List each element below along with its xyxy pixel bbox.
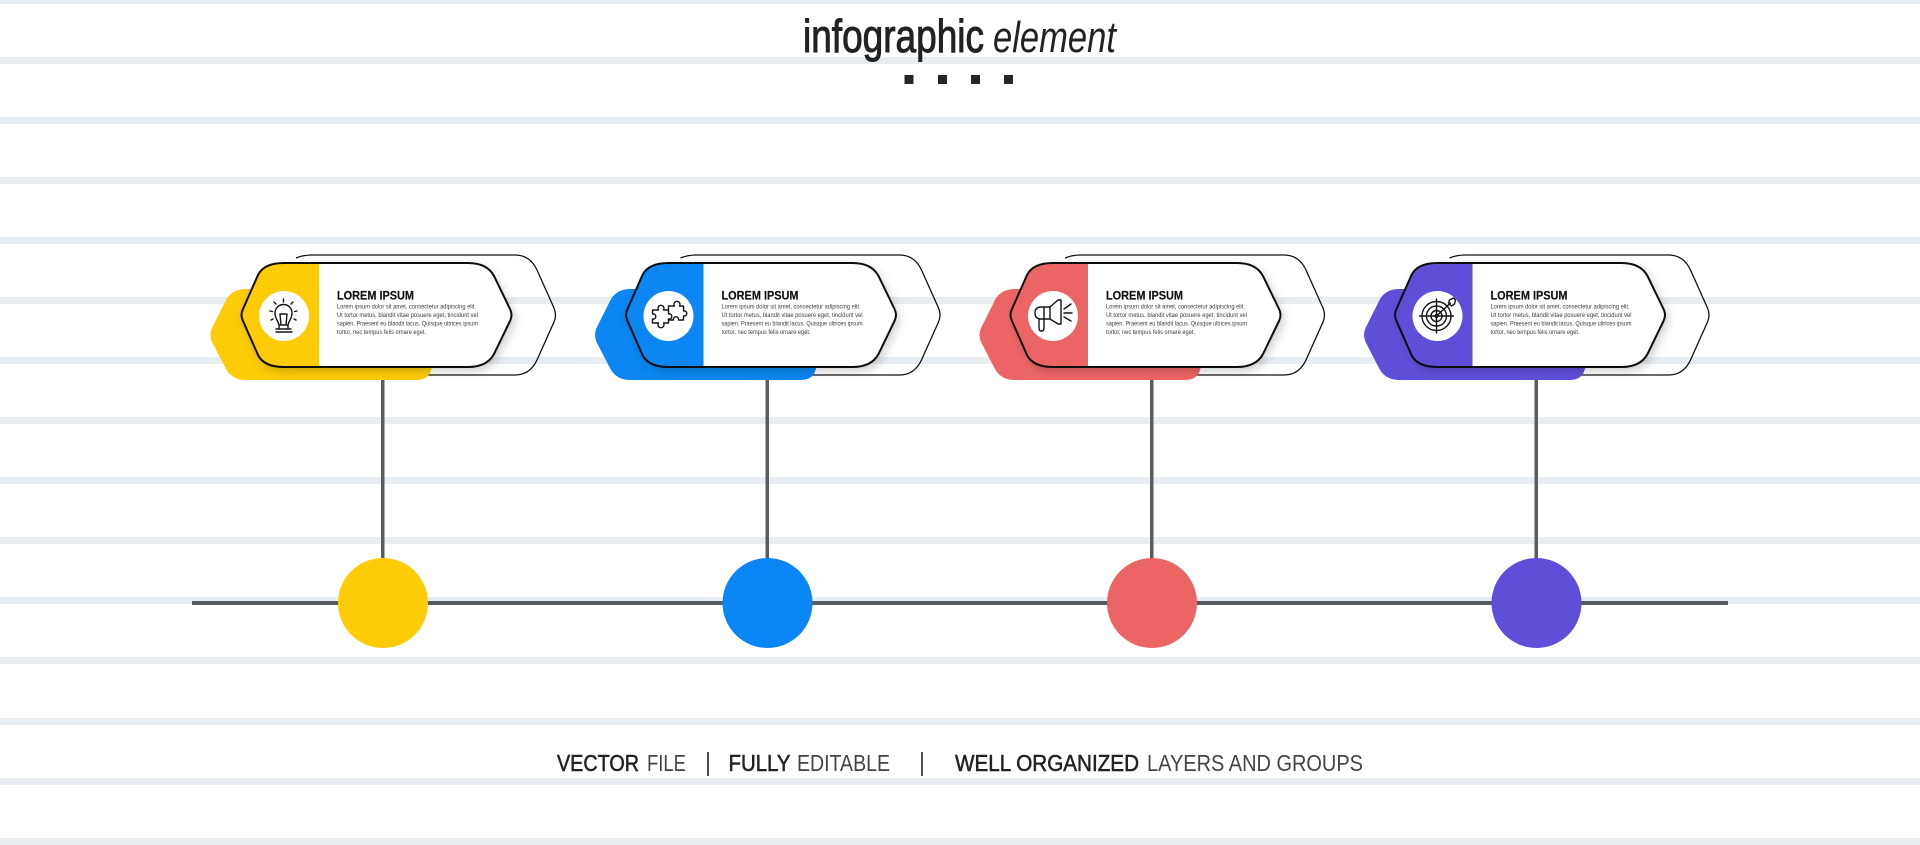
title dots	[904, 75, 1013, 84]
step 4 panel	[1364, 255, 1709, 648]
body text: Ut tortor metus, blandit vitae posuere eget, tincidunt vel	[1490, 312, 1632, 319]
body text: tortor, nec tempus felis ornare eget.	[722, 329, 811, 336]
body text: tortor, nec tempus felis ornare eget.	[1490, 329, 1580, 336]
timeline axis	[192, 601, 1728, 605]
body text	[1106, 304, 1247, 336]
title: element	[993, 13, 1117, 62]
step 2 panel	[595, 255, 940, 648]
coloured back hexagon	[210, 289, 432, 380]
icon: puzzle	[644, 291, 694, 341]
body text: Lorem ipsum dolor sit amet, consectetur adipiscing elit.	[1106, 304, 1245, 310]
footer caption: LAYERS AND GROUPS	[1147, 750, 1363, 776]
coloured back hexagon	[595, 289, 816, 380]
body text	[337, 304, 478, 336]
front card	[626, 263, 896, 367]
back outline	[1450, 255, 1709, 375]
front outline	[1395, 263, 1665, 367]
timeline node	[722, 558, 812, 648]
timeline node	[338, 558, 428, 648]
body text: Ut tortor metus, blandit vitae posuere eget, tincidunt vel	[722, 312, 862, 319]
timeline node	[1107, 558, 1197, 648]
front outline	[242, 263, 512, 367]
body text: tortor, nec tempus felis ornare eget.	[337, 329, 426, 336]
body text: sapien. Praesent eu blandit lacus. Quisque ultrices ipsum	[1106, 320, 1247, 328]
body text	[722, 304, 862, 336]
front outline	[626, 263, 896, 367]
title: infographic	[803, 10, 984, 62]
front card	[242, 263, 512, 367]
coloured card tab	[1395, 263, 1472, 367]
back outline	[1065, 255, 1324, 375]
body text: Lorem ipsum dolor sit amet, consectetur adipiscing elit.	[1490, 304, 1630, 310]
coloured card tab	[626, 263, 704, 367]
icon: light bulb	[259, 291, 309, 341]
icon: target	[1412, 291, 1462, 341]
heading: LOREM IPSUM	[722, 290, 798, 302]
footer caption: WELL ORGANIZED	[955, 750, 1139, 776]
footer caption: VECTOR	[557, 750, 639, 776]
front card	[1395, 263, 1665, 367]
connector stem	[1150, 375, 1154, 560]
coloured back hexagon	[1364, 289, 1586, 380]
coloured card tab	[1010, 263, 1088, 367]
connector stem	[766, 375, 769, 560]
footer caption: FILE	[647, 750, 686, 776]
heading: LOREM IPSUM	[337, 290, 414, 302]
body text: Lorem ipsum dolor sit amet, consectetur adipiscing elit.	[722, 304, 861, 310]
body text: sapien. Praesent eu blandit lacus. Quisque ultrices ipsum	[1490, 320, 1632, 328]
body text: tortor, nec tempus felis ornare eget.	[1106, 329, 1195, 336]
footer caption	[557, 750, 1363, 776]
front outline	[1010, 263, 1280, 367]
heading: LOREM IPSUM	[1490, 290, 1568, 302]
front card	[1010, 263, 1280, 367]
connector stem	[1534, 375, 1538, 560]
body text: sapien. Praesent eu blandit lacus. Quisque ultrices ipsum	[337, 320, 478, 328]
connector stem	[381, 375, 384, 560]
heading: LOREM IPSUM	[1106, 290, 1183, 302]
footer caption: EDITABLE	[797, 750, 890, 776]
timeline node	[1492, 558, 1582, 648]
step 3 panel	[980, 255, 1324, 648]
body text: Ut tortor metus, blandit vitae posuere eget, tincidunt vel	[1106, 312, 1247, 319]
icon: megaphone	[1028, 291, 1078, 341]
coloured back hexagon	[980, 289, 1201, 380]
body text	[1490, 304, 1632, 336]
body text: sapien. Praesent eu blandit lacus. Quisque ultrices ipsum	[722, 320, 862, 328]
body text: Ut tortor metus, blandit vitae posuere eget, tincidunt vel	[337, 312, 478, 319]
footer caption: FULLY	[728, 750, 791, 776]
back outline	[296, 255, 556, 375]
body text: Lorem ipsum dolor sit amet, consectetur adipiscing elit.	[337, 304, 476, 310]
coloured card tab	[242, 263, 319, 367]
back outline	[680, 255, 940, 375]
step 1 panel	[210, 255, 556, 648]
